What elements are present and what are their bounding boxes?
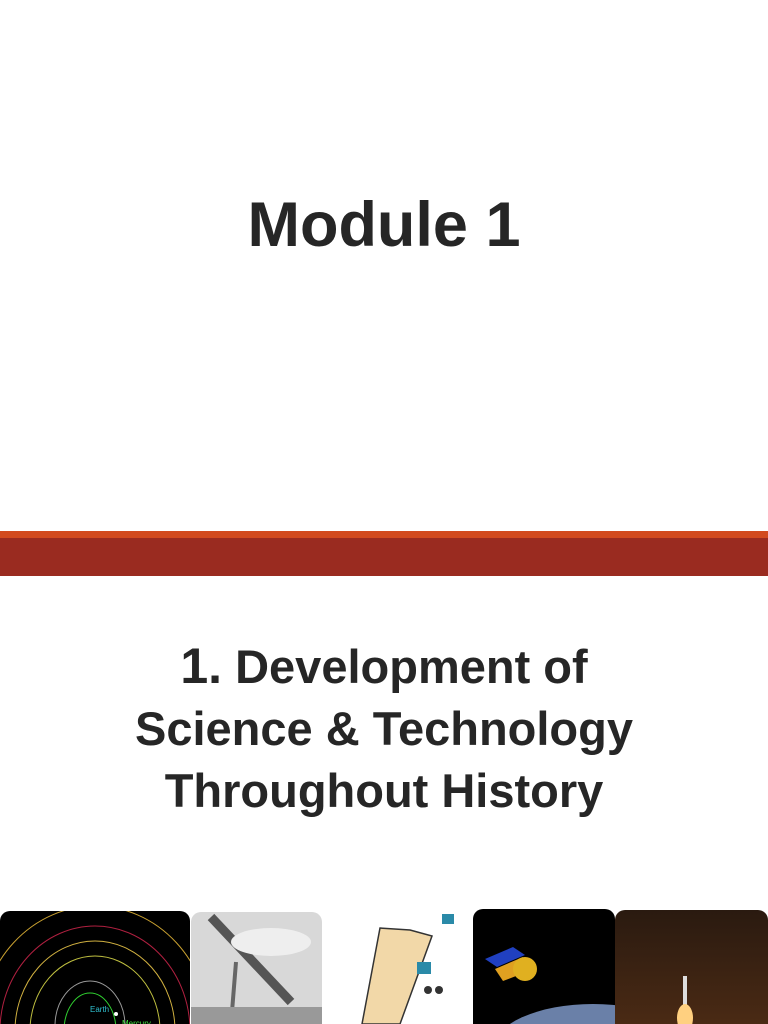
subtitle: Science & Technology (135, 702, 633, 755)
subtitle: Throughout History (165, 764, 603, 817)
subtitle: 1. Development of (180, 638, 588, 694)
title: Module 1 (247, 190, 520, 260)
image: satellite (473, 909, 615, 1024)
image: solar system: Earth (90, 1005, 109, 1014)
image: leaning tower (322, 912, 472, 1024)
image: solar system (0, 911, 190, 1024)
subtitle (135, 638, 633, 817)
image: telescope engraving (191, 912, 322, 1024)
band (0, 531, 768, 576)
image: rocket launch (615, 910, 768, 1024)
